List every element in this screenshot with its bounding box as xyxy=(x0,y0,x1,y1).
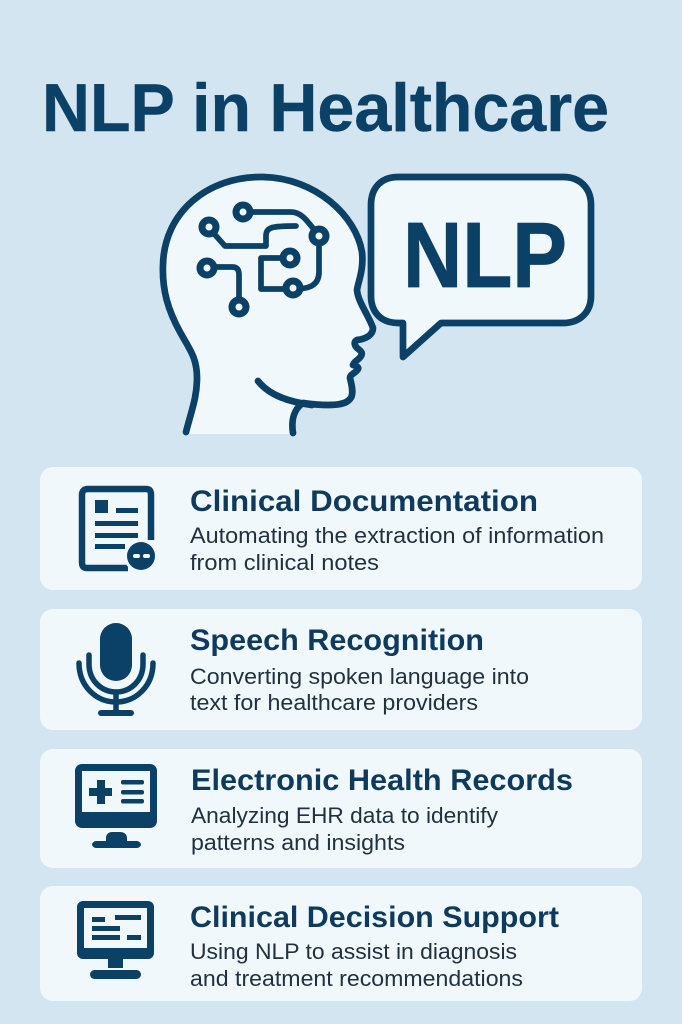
panel: electronic health records: patterns and insights xyxy=(191,830,405,855)
panel: clinical decision support: and treatment recommendations xyxy=(190,966,523,991)
panel: clinical documentation xyxy=(40,467,642,590)
icon: microphone xyxy=(79,623,153,713)
jaw line xyxy=(258,381,312,405)
bubble label: NLP xyxy=(403,203,567,307)
description: Analyzing EHR data to identify xyxy=(191,803,498,828)
panel: speech recognition: text for healthcare providers xyxy=(190,690,478,715)
heading: Clinical Documentation xyxy=(190,485,538,518)
description: Automating the extraction of information xyxy=(190,523,604,548)
icon: document xyxy=(82,489,158,573)
icon: NLP speech bubble xyxy=(371,177,591,357)
circuit nodes xyxy=(200,205,326,314)
heading: Speech Recognition xyxy=(190,624,484,657)
heading: Electronic Health Records xyxy=(191,764,573,797)
description: Using NLP to assist in diagnosis xyxy=(190,939,517,964)
circuit traces xyxy=(208,212,319,306)
panel: clinical decision support xyxy=(40,886,642,1001)
panel: speech recognition xyxy=(40,609,642,730)
head outline xyxy=(163,177,373,434)
icon: monitor with text lines xyxy=(77,901,154,979)
panel: electronic health records xyxy=(40,749,642,868)
icon: monitor with medical cross xyxy=(75,764,157,848)
panel: clinical documentation: from clinical notes xyxy=(190,550,379,575)
title: NLP in Healthcare xyxy=(42,70,609,146)
icon: head with circuit brain xyxy=(163,177,373,434)
description: Converting spoken language into xyxy=(190,664,529,689)
heading: Clinical Decision Support xyxy=(190,901,559,934)
